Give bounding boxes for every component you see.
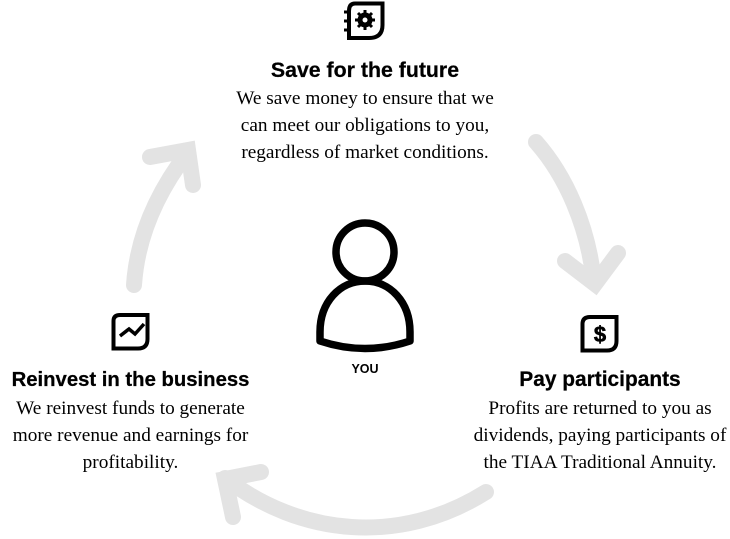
heading: Reinvest in the business [12, 369, 249, 391]
body text: more revenue and earnings for [13, 425, 248, 446]
block: reinvest in the business [12, 369, 249, 473]
body text: dividends, paying participants of [474, 425, 726, 446]
arrow: reinvest to save [134, 150, 193, 285]
icon: notebook with gear [344, 4, 382, 38]
icon: dollar [582, 317, 616, 350]
icon: dollar: $ [594, 322, 606, 347]
label: you: YOU [351, 362, 379, 376]
body text [13, 398, 248, 473]
body text [236, 88, 494, 163]
block: pay participants [474, 368, 726, 473]
body text: We save money to ensure that we [236, 88, 494, 109]
icon: person [320, 223, 410, 348]
body text: can meet our obligations to you, [241, 115, 489, 136]
arrow: save to pay [536, 142, 618, 284]
body text: profitability. [83, 452, 178, 473]
body text: regardless of market conditions. [241, 142, 489, 163]
heading: Pay participants [519, 368, 681, 391]
block: save for the future [236, 58, 494, 163]
heading: Save for the future [271, 58, 459, 82]
body text: We reinvest funds to generate [16, 398, 245, 419]
icon: trend chart [114, 315, 148, 348]
body text: the TIAA Traditional Annuity. [484, 452, 716, 473]
body text [474, 398, 726, 473]
body text: Profits are returned to you as [488, 398, 712, 419]
arrow: pay to reinvest [225, 472, 486, 527]
